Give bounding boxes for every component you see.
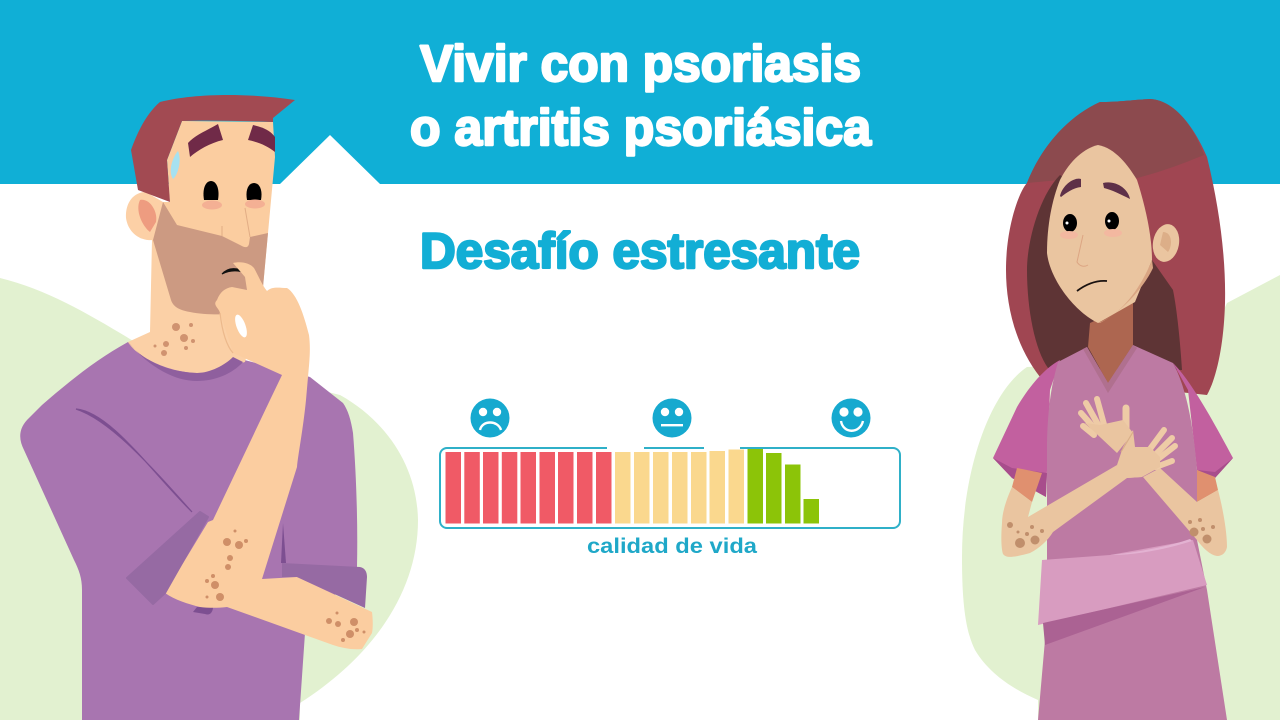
icon: happy face	[832, 398, 870, 438]
lesions on left forearm	[1007, 522, 1044, 548]
title	[410, 35, 872, 156]
woman hair	[1006, 99, 1225, 395]
quality of life meter	[440, 398, 900, 558]
man collar	[128, 342, 243, 381]
woman jaw shadow	[1098, 260, 1153, 323]
woman sash shadow	[1043, 587, 1205, 645]
woman eyes	[1060, 212, 1122, 239]
woman hair inner shadow	[1027, 175, 1182, 370]
man hair	[131, 95, 295, 202]
icon: sad face	[470, 398, 510, 438]
lesions on right forearm	[1188, 518, 1215, 544]
green background shape right	[962, 275, 1280, 720]
man character	[20, 95, 373, 720]
man mouth	[222, 269, 246, 274]
man arm fold	[281, 523, 286, 563]
icon: neutral face	[652, 398, 692, 438]
man eyebrows	[188, 124, 275, 157]
finger crease	[220, 313, 233, 353]
woman hair shaded top	[1027, 99, 1204, 183]
woman sleeve undersides	[993, 458, 1233, 497]
title: o artritis psoriásica	[410, 99, 872, 156]
woman face	[1047, 145, 1152, 323]
man shirt	[20, 342, 357, 720]
woman arms	[1001, 465, 1227, 557]
lesions on wrist	[326, 612, 366, 642]
man ear	[126, 192, 168, 240]
subtitle: Desafío estresante	[420, 223, 860, 279]
woman neck	[1088, 303, 1133, 383]
header banner	[0, 0, 1280, 184]
woman dress sleeve left	[993, 360, 1060, 497]
man face	[153, 121, 275, 313]
man sleeve right	[282, 563, 367, 608]
woman upper arm patches	[1012, 468, 1218, 502]
meter frame	[440, 445, 900, 528]
gap between fingers	[233, 313, 249, 339]
green background shape left	[0, 278, 418, 720]
woman eyebrows	[1060, 179, 1130, 199]
lesions on neck	[154, 323, 195, 356]
woman character	[993, 99, 1233, 720]
man shirt fold	[76, 409, 192, 512]
woman sash highlight	[1110, 539, 1192, 555]
title: Vivir con psoriasis	[420, 35, 861, 92]
man sleeve left	[127, 512, 208, 604]
green bars	[748, 449, 819, 524]
man beard	[153, 202, 268, 314]
woman ear	[1150, 222, 1182, 264]
red bars	[446, 452, 612, 524]
woman nose	[1077, 235, 1088, 266]
woman dress	[1038, 345, 1227, 720]
man eyes	[202, 181, 265, 210]
banner pointer notch	[280, 135, 380, 184]
woman collar	[1083, 345, 1137, 393]
meter label: calidad de vida	[587, 535, 757, 558]
man neck	[128, 240, 262, 373]
woman mouth	[1077, 281, 1107, 291]
woman dress sleeve right	[1173, 363, 1233, 478]
woman hands	[1081, 399, 1175, 478]
yellow bars	[615, 450, 744, 524]
sweat drop	[171, 151, 180, 179]
woman sash	[1038, 540, 1207, 625]
man nose line	[222, 208, 250, 237]
man shadow under elbow	[193, 607, 213, 615]
man arm and hand	[165, 262, 373, 649]
lesions on elbow	[205, 530, 248, 601]
